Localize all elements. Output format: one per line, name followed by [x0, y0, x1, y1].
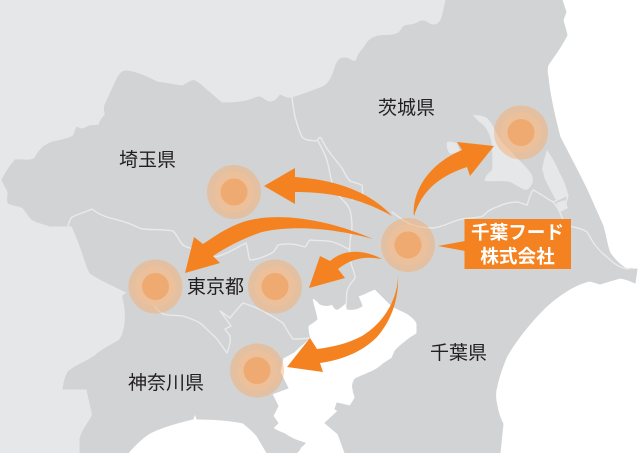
- arrow: to Kanagawa: [287, 275, 398, 372]
- location markers: [128, 106, 548, 398]
- label: Chiba: 千葉県: [430, 342, 487, 364]
- marker: Kanagawa: [230, 344, 284, 398]
- callout text: 株式会社: [480, 246, 555, 267]
- callout text: 千葉フード: [471, 222, 564, 243]
- lake: Kasumigaura: [473, 115, 533, 190]
- marker: Tokyo center: [248, 260, 302, 314]
- callout: Chiba Food company label: [438, 219, 571, 269]
- blob at river mouth: [556, 200, 568, 212]
- callout box: [464, 219, 571, 269]
- marker: Ibaraki: [494, 106, 548, 160]
- prefecture labels: [119, 97, 487, 394]
- lake: Kitaura: [542, 150, 568, 199]
- marker: Tokyo west: [128, 260, 182, 314]
- arrow: to Tokyo west: [185, 217, 373, 273]
- label: Saitama: 埼玉県: [119, 149, 176, 171]
- arrow: to Ibaraki: [414, 142, 494, 216]
- label: Ibaraki: 茨城県: [378, 97, 435, 119]
- lakes: [447, 115, 568, 199]
- background: surrounding land: [0, 0, 450, 453]
- lake: small pond: [447, 142, 460, 154]
- delivery arrows: [185, 142, 494, 372]
- marker: Chiba Food head office: [381, 218, 435, 272]
- arrow: to Tokyo center: [309, 252, 382, 288]
- rivers: [68, 98, 632, 353]
- marker: Saitama: [207, 165, 261, 219]
- label: Kanagawa: 神奈川県: [128, 372, 204, 394]
- arrow: to Saitama: [264, 168, 392, 216]
- callout pointer: [438, 241, 465, 251]
- label: Tokyo: 東京都: [187, 276, 244, 298]
